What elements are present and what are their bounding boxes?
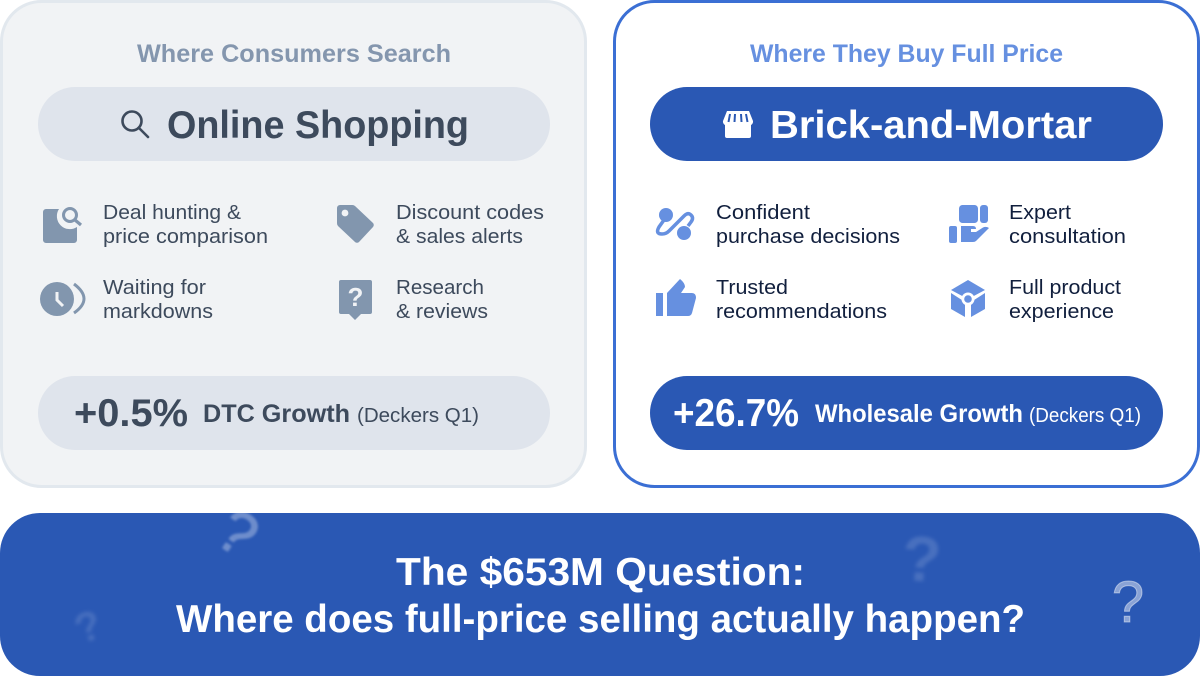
item: expert consultation [949, 201, 1126, 248]
item: deal hunting [43, 201, 268, 248]
icon: storefront [723, 111, 753, 138]
banner headline: Where does full-price selling actually happen? [176, 598, 1025, 641]
pill: brick-and-mortar: Brick-and-Mortar [770, 104, 1092, 147]
item: full product experience: Full product [1009, 276, 1121, 299]
item: trusted recommendations: recommendations [716, 300, 887, 323]
banner: the $653M question [0, 496, 1200, 676]
item: discount codes [337, 201, 544, 248]
icon: price tag [337, 205, 374, 243]
icon: product cube [951, 280, 985, 317]
stat pill: wholesale growth [650, 376, 1163, 450]
item: research and reviews [339, 276, 488, 323]
icon: route [658, 208, 692, 240]
heading: where consumers search: Where Consumers Search [137, 40, 451, 68]
heading: where they buy full price: Where They Buy Full Price [750, 40, 1063, 68]
item: research and reviews: Research [396, 276, 484, 299]
pill: online shopping [38, 87, 550, 161]
panel: where consumers search [2, 2, 586, 486]
stat pill: DTC growth: +0.5% [74, 392, 188, 435]
icon: thumbs up [656, 279, 696, 316]
stat pill: DTC growth: (Deckers Q1) [357, 404, 479, 427]
item: full product experience [951, 276, 1121, 323]
icon: hand with blocks [949, 205, 989, 243]
pill: brick-and-mortar [650, 87, 1163, 161]
banner headline [176, 551, 1025, 641]
stat pill: wholesale growth: +26.7% [673, 392, 799, 435]
stat pill: DTC growth [38, 376, 550, 450]
item: trusted recommendations: Trusted [716, 276, 788, 299]
icon: document with magnifier [43, 208, 81, 243]
stat pill: wholesale growth: (Deckers Q1) [1029, 404, 1141, 427]
item: waiting for markdowns [40, 276, 213, 323]
item: research and reviews: & reviews [396, 300, 488, 323]
item: trusted recommendations [656, 276, 887, 323]
decorative question marks: ? [68, 600, 108, 653]
item: discount codes: Discount codes [396, 201, 544, 224]
item: confident purchase decisions: Confident [716, 201, 810, 224]
stat pill: DTC growth: DTC Growth [203, 400, 350, 428]
item: deal hunting: price comparison [103, 225, 268, 248]
decorative question marks: ? [1112, 570, 1144, 635]
stat pill: wholesale growth: Wholesale Growth [815, 400, 1023, 428]
pill: online shopping: Online Shopping [167, 104, 469, 147]
item: confident purchase decisions: purchase decisions [716, 225, 900, 248]
icon: question bubble: ? [348, 282, 363, 312]
icon: magnifier [122, 112, 148, 137]
item: confident purchase decisions [658, 201, 900, 248]
item: waiting for markdowns: markdowns [103, 300, 213, 323]
decorative question marks: ? [900, 522, 944, 596]
item: discount codes: & sales alerts [396, 225, 523, 248]
panel: where they buy full price [614, 2, 1198, 486]
decorative question marks [75, 513, 1142, 642]
banner headline: The $653M Question: [396, 551, 805, 594]
decorative question marks: ? [205, 496, 270, 570]
item: full product experience: experience [1009, 300, 1114, 323]
icon: question bubble [339, 280, 372, 320]
item: waiting for markdowns: Waiting for [103, 276, 206, 299]
item: expert consultation: consultation [1009, 225, 1126, 248]
item: expert consultation: Expert [1009, 201, 1071, 224]
icon: clock [40, 282, 84, 316]
item: deal hunting: Deal hunting & [103, 201, 241, 224]
